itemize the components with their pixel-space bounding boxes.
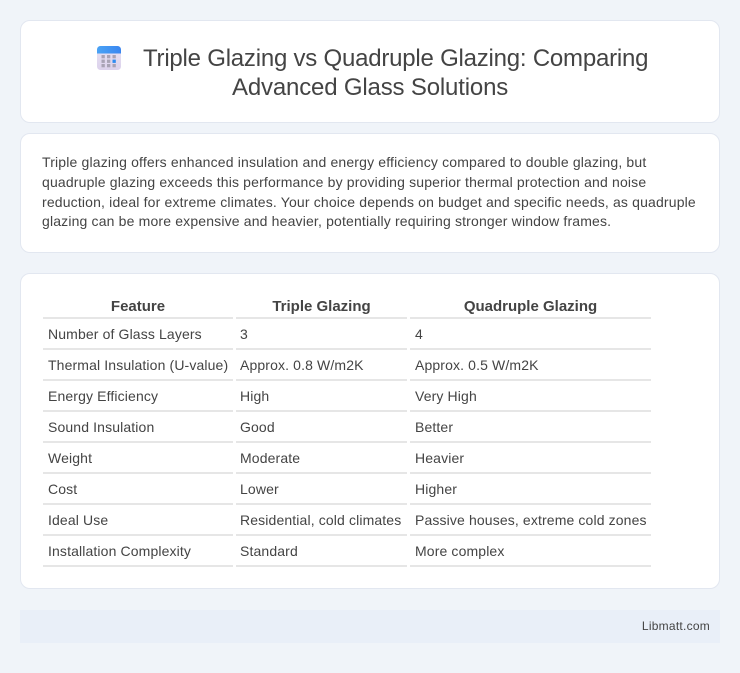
title: Advanced Glass Solutions: [232, 74, 508, 101]
table row: energy efficiency: [48, 388, 477, 404]
title: Triple Glazing vs Quadruple Glazing: Comparing: [143, 45, 648, 72]
table row: ideal use: Ideal Use: [48, 512, 108, 528]
table row: sound insulation: [48, 419, 453, 435]
table row: weight: Weight: [48, 450, 92, 466]
table row: ideal use: Passive houses, extreme cold zones: [415, 512, 647, 528]
table row: ideal use: Residential, cold climates: [240, 512, 401, 528]
table header: [111, 298, 597, 315]
icon: calendar: [97, 46, 121, 70]
table header: Feature: [111, 298, 165, 315]
table row: glass layers: Number of Glass Layers: [48, 326, 202, 342]
table row: installation complexity: Installation Complexity: [48, 543, 191, 559]
table row: sound insulation: Good: [240, 419, 275, 435]
text block: introduction: quadruple glazing exceeds this performance by providing superior thermal protection and noise: [42, 174, 646, 190]
panel: comparison table: [20, 273, 720, 589]
table row: installation complexity: Standard: [240, 543, 298, 559]
panel: introduction: [20, 133, 720, 253]
table row: energy efficiency: Energy Efficiency: [48, 388, 158, 404]
table row: glass layers: 3: [240, 326, 248, 342]
table row: thermal insulation: [48, 357, 539, 373]
title: [143, 45, 648, 101]
table row: cost: Lower: [240, 481, 279, 497]
table row: cost: [48, 481, 457, 497]
table row: energy efficiency: High: [240, 388, 269, 404]
table row: cost: Cost: [48, 481, 77, 497]
footer brand: Libmatt.com: [642, 619, 710, 633]
table row: thermal insulation: Approx. 0.8 W/m2K: [240, 357, 364, 373]
table header: Quadruple Glazing: [464, 298, 597, 315]
text block: introduction: glazing can be more expensive and heavier, potentially requiring stronger window frames.: [42, 213, 611, 229]
text block: introduction: [42, 154, 696, 229]
table row: weight: [48, 450, 464, 466]
table header: Triple Glazing: [272, 298, 371, 315]
table row: cost: Higher: [415, 481, 457, 497]
table row: glass layers: 4: [415, 326, 423, 342]
table row: glass layers: [48, 326, 423, 342]
footer: [20, 610, 720, 643]
text block: introduction: reduction, ideal for extreme climates. Your choice depends on budget and specific needs, as quadruple: [42, 194, 696, 210]
table row: sound insulation: Better: [415, 419, 453, 435]
table row: installation complexity: [48, 543, 504, 559]
table row: ideal use: [48, 512, 647, 528]
table row: sound insulation: Sound Insulation: [48, 419, 154, 435]
table row: weight: Heavier: [415, 450, 464, 466]
table row: installation complexity: More complex: [415, 543, 504, 559]
table row: thermal insulation: Thermal Insulation (U-value): [48, 357, 228, 373]
table row: thermal insulation: Approx. 0.5 W/m2K: [415, 357, 539, 373]
panel: header: [20, 20, 720, 123]
text block: introduction: Triple glazing offers enhanced insulation and energy efficiency compared to double glazing, but: [42, 154, 646, 170]
table row: energy efficiency: Very High: [415, 388, 477, 404]
table row: weight: Moderate: [240, 450, 300, 466]
